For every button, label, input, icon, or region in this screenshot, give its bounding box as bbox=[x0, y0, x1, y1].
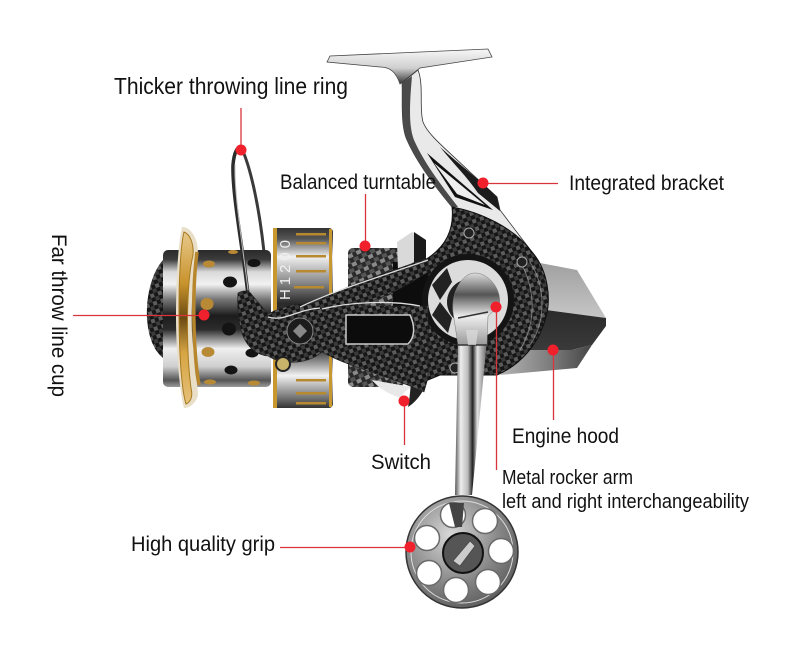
engine hood bbox=[500, 263, 606, 375]
gold pin bbox=[276, 357, 290, 371]
balanced turntable bbox=[348, 232, 429, 407]
callout: engine hood bbox=[512, 344, 619, 448]
fishing reel illustration bbox=[147, 49, 606, 608]
callout: integrated bracket: Integrated bracket bbox=[569, 172, 724, 195]
rear spool drum bbox=[273, 228, 333, 408]
callout: metal rocker arm: Metal rocker arm bbox=[502, 467, 633, 489]
callout: thicker throwing line ring: Thicker throwing line ring bbox=[114, 73, 348, 99]
callout: engine hood: Engine hood bbox=[512, 425, 619, 448]
callout: switch bbox=[371, 396, 431, 474]
callout: far throw line cup bbox=[47, 234, 210, 397]
callout: switch: Switch bbox=[371, 451, 431, 474]
callout: high quality grip bbox=[131, 533, 416, 556]
callout: balanced turntable bbox=[280, 171, 436, 252]
high quality grip wheel bbox=[406, 496, 518, 608]
bracket body carbon housing bbox=[422, 207, 548, 380]
integrated bracket with foot bbox=[327, 49, 532, 252]
metal rocker arm bbox=[453, 273, 500, 495]
callout: metal rocker arm bbox=[490, 302, 749, 513]
rotor screw bbox=[287, 318, 313, 344]
bail wire, front strand bbox=[233, 147, 248, 295]
callout: balanced turntable: Balanced turntable bbox=[280, 171, 436, 194]
far throw line cup spool bbox=[147, 227, 271, 408]
callout: thicker throwing line ring bbox=[114, 73, 348, 156]
rotor arm with carbon pattern bbox=[238, 258, 428, 392]
model marking: H1200 bbox=[277, 240, 294, 300]
callout: far throw line cup: Far throw line cup bbox=[47, 234, 70, 397]
housing screws bbox=[450, 228, 527, 373]
callout: integrated bracket bbox=[478, 172, 724, 195]
callout: metal rocker arm: left and right interchangeability bbox=[502, 491, 749, 513]
bail wire, rear strand bbox=[241, 147, 264, 252]
callout: high quality grip: High quality grip bbox=[131, 533, 275, 556]
